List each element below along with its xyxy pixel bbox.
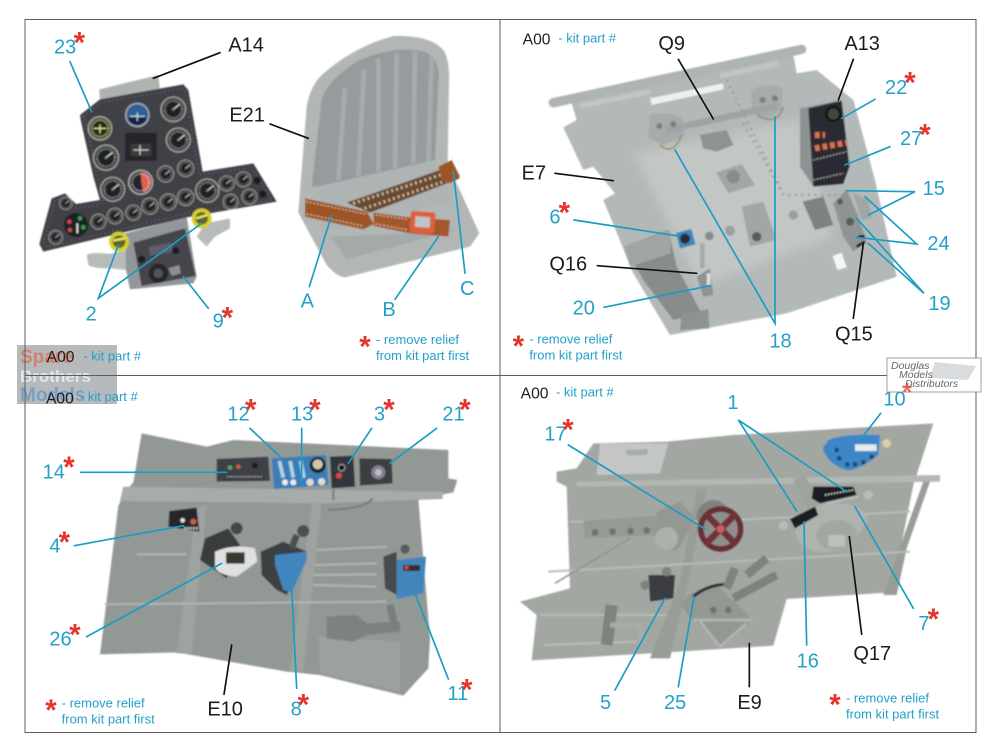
legend: remove relief: * [45,694,57,727]
callout: 18: 18 [769,330,792,352]
callout: 19 [857,218,951,315]
legend: kit part number: - kit part # [80,389,139,404]
callout: 17: * [562,413,574,446]
legend: remove relief [45,694,155,727]
watermark: Douglas Models Distributors: Models [899,369,934,381]
callout: E10 [207,645,243,721]
legend: kit part number: - kit part # [558,31,617,46]
legend: remove relief: from kit part first [376,348,469,363]
callout: 12 [227,393,280,457]
legend: remove relief: - remove relief [62,695,145,710]
callout: B [382,237,438,321]
callout: 22: 22 [885,77,907,99]
callout: A: A [301,290,315,312]
legend: kit part number [523,31,617,48]
legend: kit part number [47,349,142,366]
callout: 13 [291,393,321,482]
legend: remove relief: from kit part first [529,347,623,362]
callout: 7: 7 [918,613,929,635]
callout: Q16: Q16 [549,254,587,276]
photo: instrument panel [39,75,277,289]
callout: 11: * [461,673,473,706]
callout: 22 [842,67,916,118]
panel: left side wall [43,389,473,727]
callout: 15 [847,178,945,215]
callout: 11: 11 [447,683,468,705]
callout: 6: 6 [549,206,560,228]
callout: 21 [390,393,471,463]
callout: 23 [54,27,92,112]
callout: 23: * [74,27,86,60]
legend: kit part number: A00 [521,385,549,402]
legend: remove relief: from kit part first [846,706,939,721]
watermark: Douglas Models Distributors: Distributors [905,378,959,390]
callout: 2: 2 [86,304,97,326]
callout: 4: * [59,526,71,559]
callout: 12: 12 [227,404,250,426]
callout: 10 [860,389,906,440]
callout: C [453,172,474,300]
callout: 26: * [69,618,81,651]
callout: 10: 10 [883,389,906,411]
legend: remove relief: * [513,330,525,363]
callout: 27 [845,118,931,165]
callout: 6: * [559,197,571,230]
callout: Q9 [658,33,713,119]
callout: 7: * [928,603,940,636]
callout: 27: 27 [900,128,922,150]
callout: E7: E7 [522,162,546,184]
callout: 24: 24 [927,233,950,255]
callout: 26: 26 [49,629,72,651]
callout: E9 [737,643,762,714]
callout: 17 [544,413,705,529]
callout: 15: 15 [923,178,945,200]
watermark: Douglas Models Distributors [887,358,981,407]
callout: 1 [727,392,847,511]
callout: 9 [183,277,234,335]
legend: kit part number: A00 [46,390,74,407]
watermark: Spare Brothers Models: Models [20,385,85,406]
callout: 20: 20 [573,297,595,319]
photo: floor plate [553,49,897,335]
callout: 3 [348,393,395,463]
callout: 14: * [63,451,75,484]
callout: B: B [382,299,396,321]
legend: kit part number: - kit part # [556,385,615,400]
callout: 17: 17 [544,424,567,446]
watermark: Spare Brothers Models [17,345,117,406]
callout: 4: 4 [49,536,60,558]
callout: A13: A13 [844,33,880,55]
callout: 21: 21 [442,404,465,426]
callout: 23: 23 [54,36,76,58]
callout: 25: 25 [664,692,686,714]
callout: 27: * [919,118,931,151]
callout: 6 [549,197,678,236]
callout: 3: * [383,393,395,426]
callout: A13 [838,33,880,100]
callout: E21 [229,105,308,138]
legend: remove relief: - remove relief [529,331,613,346]
callout: A [301,215,332,312]
callout: Q9: Q9 [658,33,685,55]
legend: kit part number [46,389,139,407]
legend: remove relief: * [829,688,841,721]
callout: 16: 16 [797,650,819,672]
watermark: Spare Brothers Models: Brothers [20,367,91,386]
callout: Q16 [549,254,697,276]
callout: Q15 [835,243,873,346]
callout: 14 [43,451,227,484]
callout: 12: * [245,393,257,426]
callout: 14: 14 [43,461,65,483]
callout: 19: 19 [928,293,951,315]
callout: 18 [675,117,792,352]
callout: Q15: Q15 [835,324,873,346]
watermark: Douglas Models Distributors: * [902,377,913,407]
legend: kit part number: A00 [47,349,75,366]
callout: 8: * [298,688,310,721]
legend: remove relief: - remove relief [846,690,929,705]
callout: 26 [49,563,222,651]
photo: left wall [100,433,457,696]
watermark: Douglas Models Distributors: Douglas [891,360,930,372]
callout: C: C [460,278,474,300]
callout: Q17: Q17 [853,643,891,665]
callout: 24 [857,197,950,255]
callout: 9: * [222,302,234,335]
callout: 13: 13 [291,404,313,426]
legend: remove relief [359,331,469,364]
legend: remove relief: * [359,331,371,364]
photo: right wall [520,423,940,660]
callout: Q17 [849,537,891,665]
callout: 13: * [309,393,321,426]
callout: 5 [600,598,665,714]
callout: 25 [664,597,694,714]
panel: instrument panel and seat [39,27,479,366]
photo: pilot seat with belts [298,36,479,277]
legend: remove relief: from kit part first [62,711,155,726]
callout: 1: 1 [727,392,738,414]
callout: E10: E10 [207,699,243,721]
callout: 5: 5 [600,692,611,714]
callout: 8: 8 [291,699,302,721]
callout: 3: 3 [374,404,385,426]
callout: E21: E21 [229,105,265,127]
callout: 21: * [459,393,471,426]
callout: 22: * [904,67,916,100]
callout: A14: A14 [228,35,264,57]
callout: 2 [86,223,202,326]
callout: 7 [855,507,940,636]
callout: E7 [522,162,613,184]
legend: kit part number: - kit part # [83,349,142,364]
callout: 11 [415,593,473,706]
legend: kit part number [521,385,615,402]
panel: cockpit floor [513,31,951,363]
legend: remove relief [513,330,623,363]
callout: 4 [49,526,183,559]
callout: 9: 9 [213,310,224,332]
legend: remove relief [829,688,939,721]
callout: A14 [153,35,264,78]
callout: 8 [291,588,310,721]
callout: E9: E9 [737,692,762,714]
panel: right side wall [520,385,940,721]
legend: kit part number: A00 [523,31,551,48]
callout: 20 [573,286,710,319]
watermark: Spare Brothers Models: Spare [20,347,73,368]
legend: remove relief: - remove relief [376,332,459,347]
